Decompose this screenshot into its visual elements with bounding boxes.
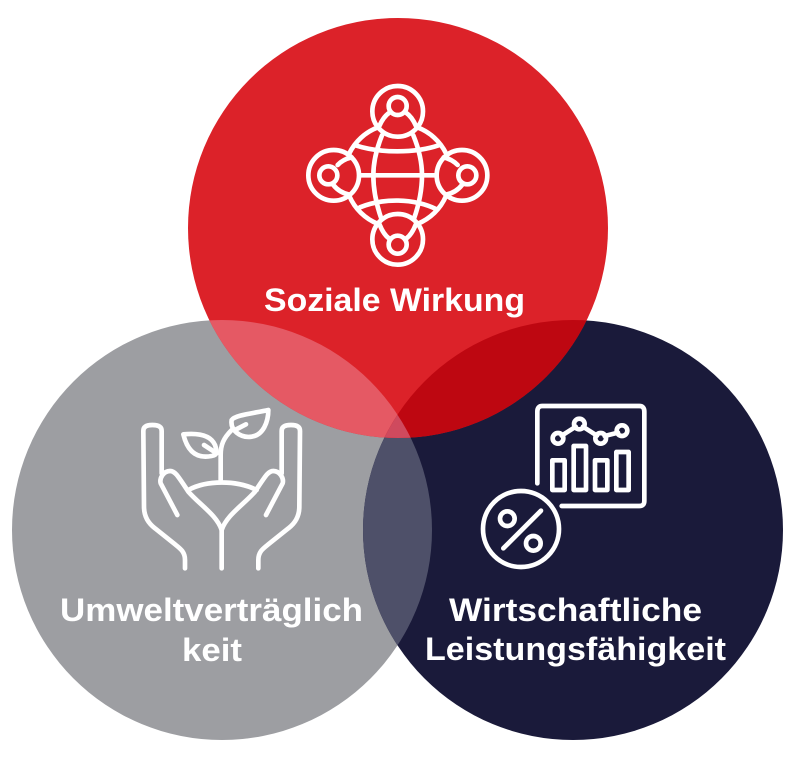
overlap: red and gray — [210, 320, 410, 438]
overlap: center of all three — [384, 415, 410, 438]
icon: chart with percent sign — [483, 406, 644, 567]
heading: Wirtschaftliche Leistungsfähigkeit — [425, 592, 726, 667]
heading: Wirtschaftliche Leistungsfähigkeit: Leistungsfähigkeit — [425, 631, 726, 667]
heading: Soziale Wirkung: Soziale Wirkung — [264, 282, 525, 318]
icon: hands holding a seedling — [143, 410, 300, 568]
icon: globe with people — [308, 86, 487, 265]
heading: Wirtschaftliche Leistungsfähigkeit: Wirtschaftliche — [449, 592, 702, 628]
overlap: red and navy — [384, 320, 586, 438]
circle: gray, Umweltverträglichkeit — [12, 320, 432, 740]
circle: navy, Wirtschaftliche Leistungsfähigkeit — [363, 320, 783, 740]
overlap: gray and navy — [363, 438, 432, 645]
heading: Umweltverträglichkeit: keit — [182, 632, 242, 668]
circle: red, Soziale Wirkung — [188, 18, 608, 438]
heading: Umweltverträglichkeit: Umweltverträglich — [60, 592, 363, 628]
heading: Umweltverträglichkeit — [60, 592, 363, 668]
